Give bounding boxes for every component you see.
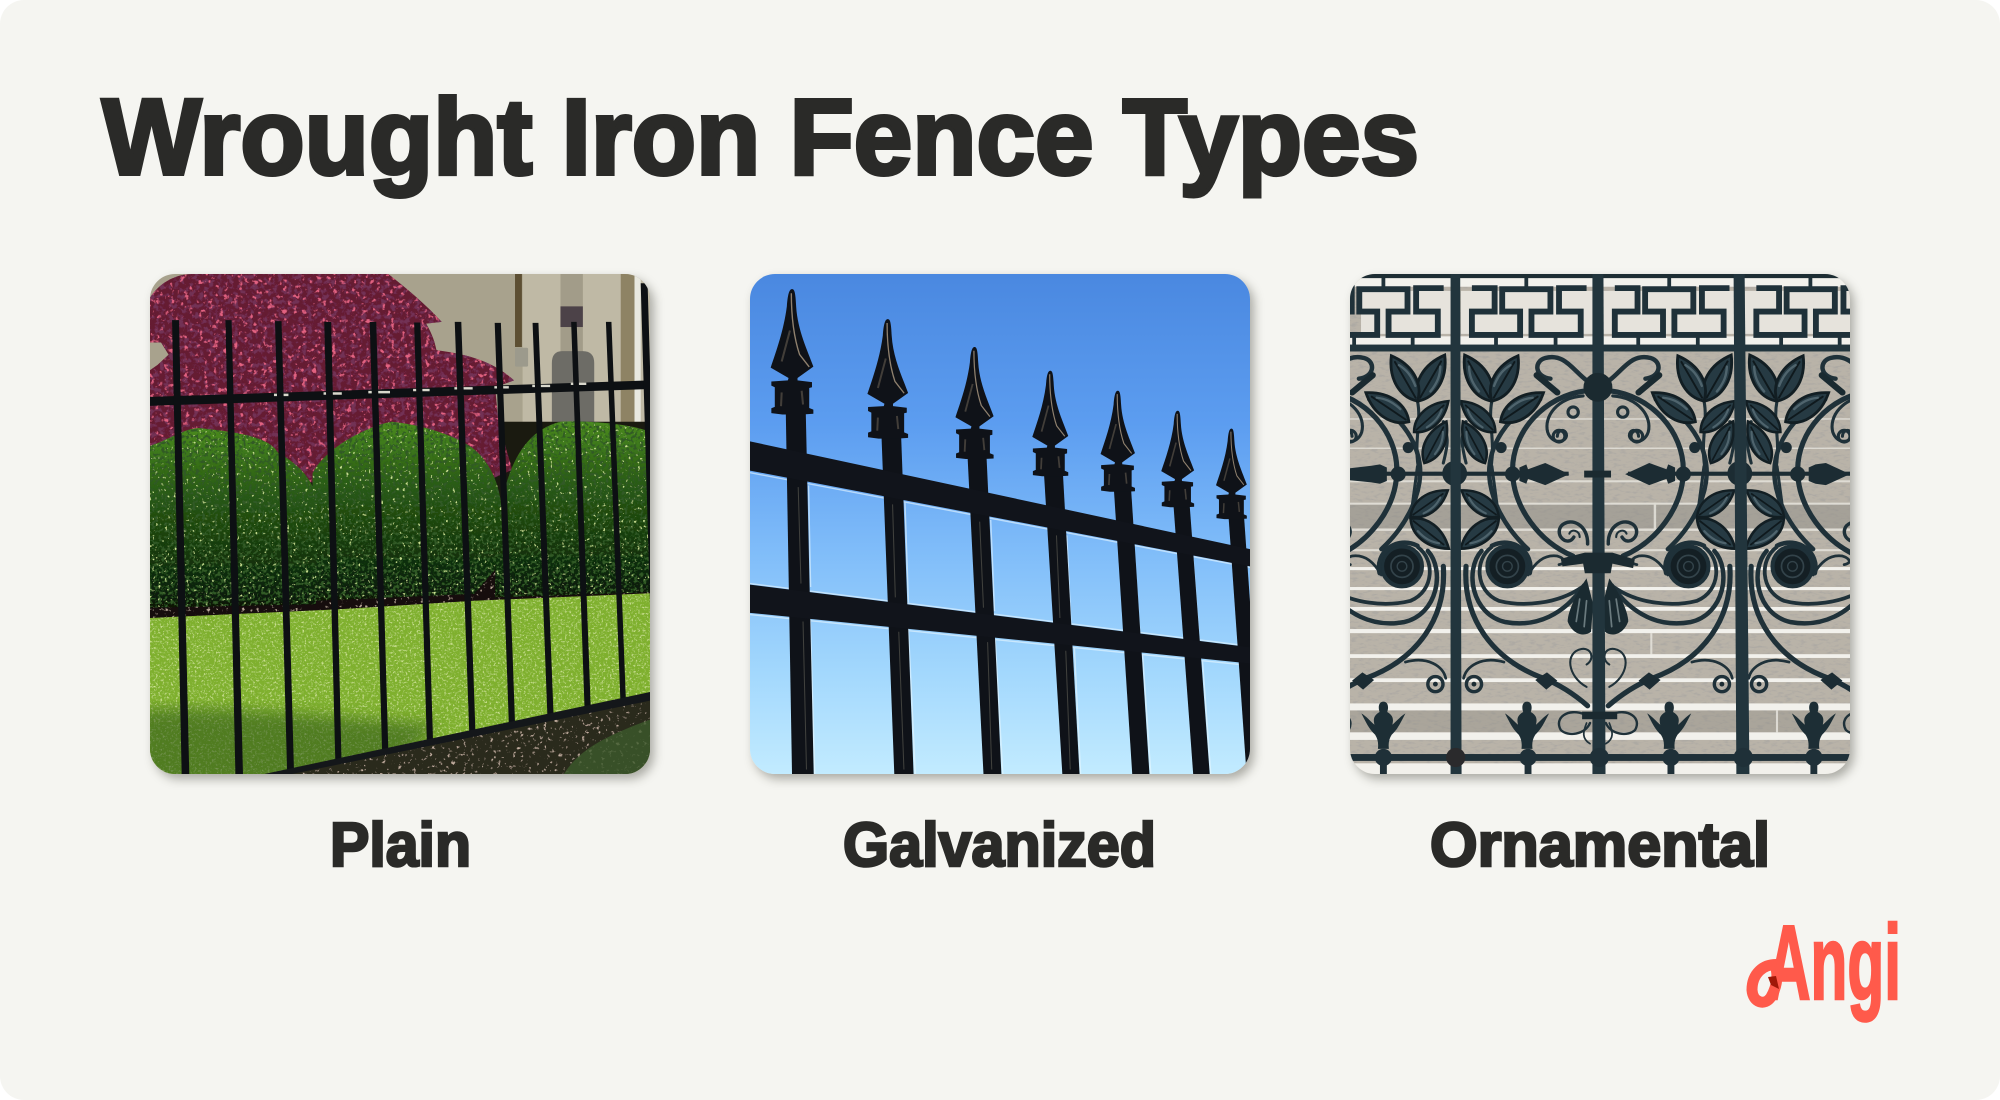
fence bottom rail	[264, 692, 650, 774]
greek key frieze	[1329, 276, 1871, 346]
lower frieze rail	[1350, 345, 1850, 351]
logo: Angi	[1746, 904, 1901, 1023]
scrollwork and leaves	[1316, 350, 1878, 744]
dark shade behind shrubs	[150, 422, 650, 615]
upper rail	[750, 441, 1250, 566]
post collars	[1561, 373, 1635, 719]
fence pickets	[172, 283, 657, 774]
label: Galvanized: Galvanized	[843, 811, 1156, 880]
logo swash	[1752, 965, 1782, 1002]
label: Plain: Plain	[330, 811, 471, 880]
spear finials	[771, 289, 1247, 519]
post wear marks	[798, 487, 1070, 770]
gravel under rail	[268, 695, 650, 774]
lawn shadow	[137, 709, 440, 787]
blue sky	[750, 274, 1250, 774]
building wall	[150, 274, 650, 774]
red maple tree	[150, 274, 514, 484]
mulch bed	[150, 563, 650, 621]
tan wall patch at left edge	[150, 343, 169, 370]
hedge bushes	[150, 421, 650, 608]
frieze rails	[1350, 269, 1850, 283]
logo wordmark: Angi	[1767, 904, 1901, 1022]
fence posts	[1451, 274, 1749, 774]
lawn	[150, 593, 650, 774]
middle rail with spears	[1350, 461, 1850, 486]
title: Wrought Iron Fence Types	[102, 76, 1419, 197]
panel: plain fence photo	[150, 274, 650, 774]
panel: ornamental fence photo	[1350, 274, 1850, 774]
panel: galvanized fence photo	[750, 274, 1250, 774]
lower rail	[750, 585, 1250, 663]
fence posts	[786, 413, 1262, 774]
label: Ornamental: Ornamental	[1430, 811, 1770, 880]
ground plants	[564, 720, 650, 774]
post highlights	[750, 473, 1250, 774]
bottom rail	[1350, 748, 1850, 775]
stone wall and steps	[1350, 274, 1850, 774]
logo fold	[1768, 976, 1779, 989]
fence top rail	[150, 380, 650, 406]
cast flowers along bottom	[1361, 702, 1836, 749]
